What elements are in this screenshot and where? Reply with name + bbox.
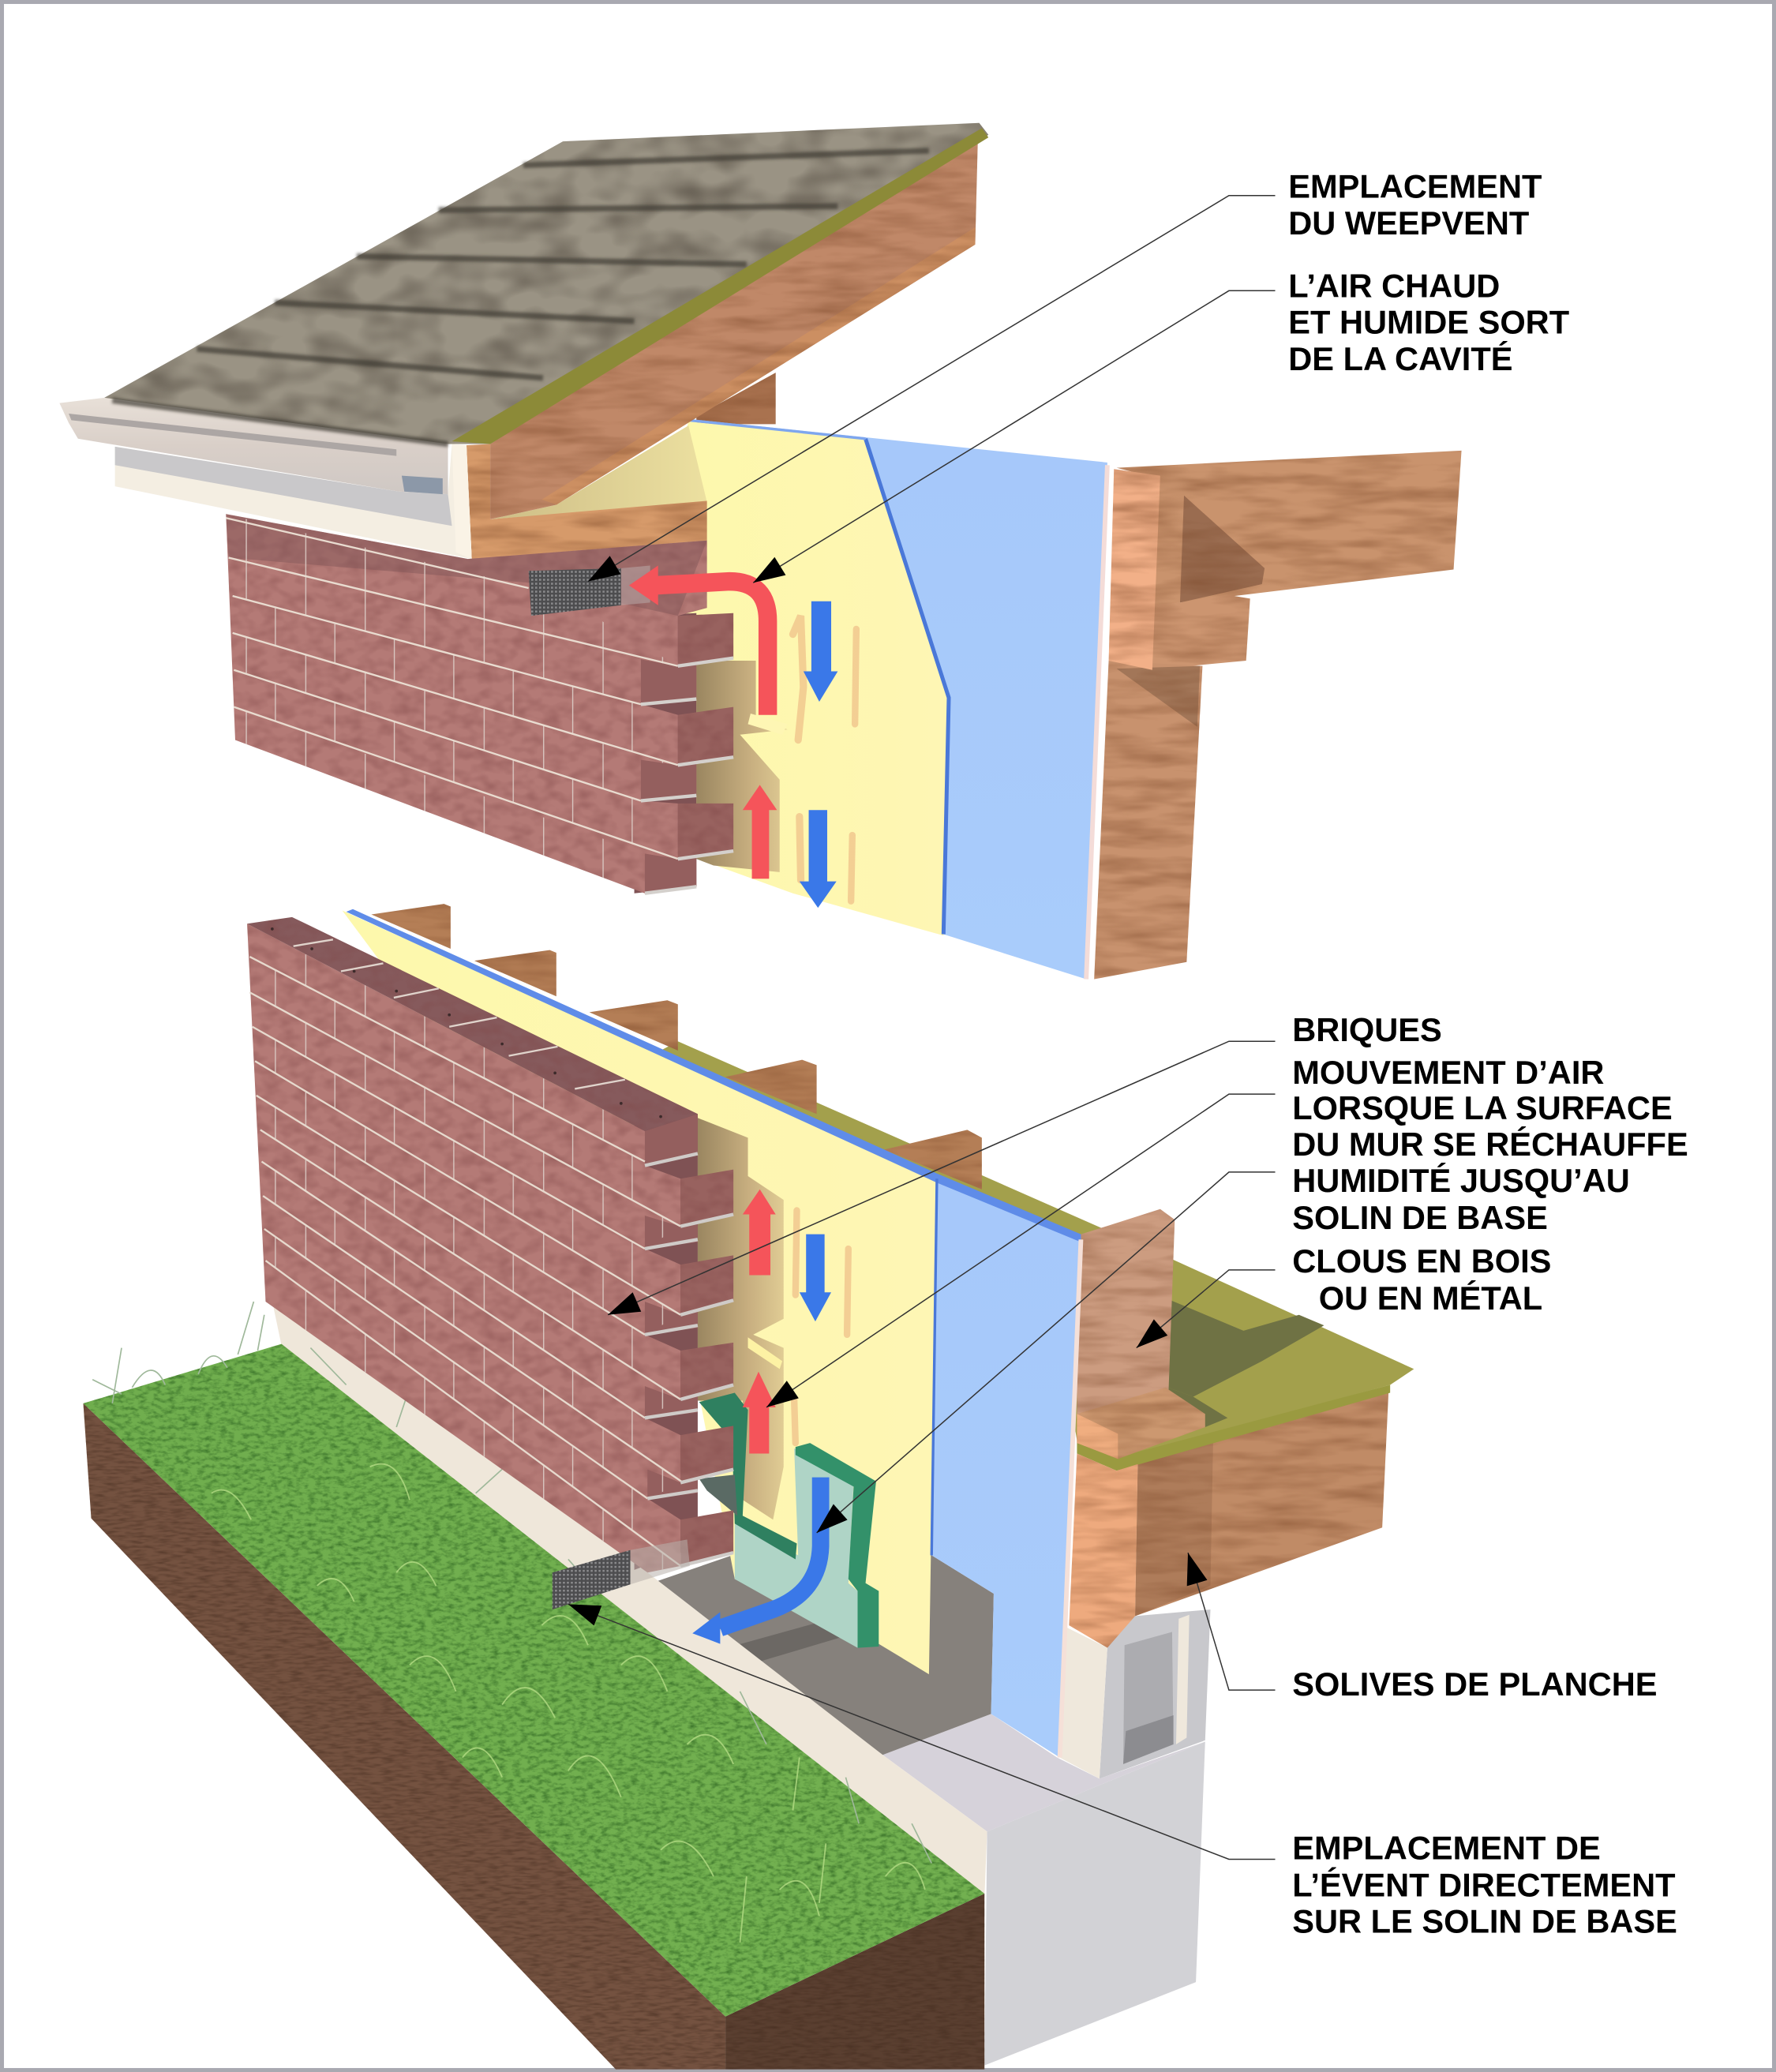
mortar lines xyxy=(249,957,684,1566)
soil block xyxy=(83,1403,984,2070)
leader: air chaud xyxy=(753,290,1276,583)
label: emplacement du weepvent: DU WEEPVENT xyxy=(1288,204,1529,242)
label: briques: BRIQUES xyxy=(1292,1011,1442,1048)
label: évent: SUR LE SOLIN DE BASE xyxy=(1292,1902,1677,1939)
label: clous: CLOUS EN BOIS xyxy=(1292,1242,1551,1280)
brick end faces xyxy=(680,1170,733,1566)
foundation concrete xyxy=(882,1714,1205,2066)
nail streaks lower xyxy=(794,1210,849,1443)
mortar lines xyxy=(226,518,678,859)
upper brick wall xyxy=(226,514,733,894)
grass blades back edge xyxy=(92,1302,931,1863)
floor sheathing xyxy=(661,1041,1414,1459)
rim joist xyxy=(1135,1386,1388,1616)
leader: humidité xyxy=(817,1172,1276,1533)
icon: weep vent upper xyxy=(529,566,650,616)
brick top face xyxy=(247,917,698,1131)
vertical stud lower xyxy=(1069,1209,1205,1648)
leader: clous xyxy=(1137,1270,1276,1348)
grass xyxy=(83,1302,984,2017)
label: humidité: SOLIN DE BASE xyxy=(1292,1199,1548,1236)
panel: blue insulation upper xyxy=(688,419,1107,980)
cavity shading lower xyxy=(698,1118,784,1519)
arrow: blue down 2 xyxy=(800,810,837,908)
label: mouvement d'air xyxy=(1292,1054,1688,1163)
cavity shading upper xyxy=(684,541,788,872)
studs behind the wall xyxy=(371,904,982,1190)
label: mouvement d'air: MOUVEMENT D’AIR xyxy=(1292,1054,1604,1091)
panel: soffit and gutter xyxy=(59,398,472,559)
wood joist upper right xyxy=(1094,451,1462,980)
label: air chaud: ET HUMIDE SORT xyxy=(1288,304,1569,341)
panel: yellow sheathing lower xyxy=(343,910,937,1674)
arrow: red up upper xyxy=(743,785,777,879)
olive edge xyxy=(1077,1384,1390,1471)
leader lines and arrowheads xyxy=(568,196,1276,1859)
label: solives: SOLIVES DE PLANCHE xyxy=(1292,1665,1658,1703)
label: air chaud: DE LA CAVITÉ xyxy=(1288,340,1512,377)
rafter xyxy=(466,139,978,559)
brick end faces xyxy=(678,613,733,859)
label: air chaud: L’AIR CHAUD xyxy=(1288,268,1500,305)
lower assembly: foundation, ground and wall xyxy=(83,904,1414,2070)
label: emplacement du weepvent xyxy=(1288,167,1542,242)
base flashing xyxy=(699,1393,879,1648)
leader: briques xyxy=(608,1041,1276,1315)
lower brick wall xyxy=(247,917,733,1572)
label: évent: L’ÉVENT DIRECTEMENT xyxy=(1292,1866,1676,1903)
concrete block xyxy=(1057,1609,1210,1778)
upper assembly: roof and wall section xyxy=(59,123,1462,980)
leader: emplacement du weepvent xyxy=(588,196,1276,582)
panel: yellow sheathing upper xyxy=(661,422,949,935)
arrow: blue down 1 xyxy=(804,601,837,702)
label: mouvement d'air: DU MUR SE RÉCHAUFFE xyxy=(1292,1126,1688,1163)
arrow: red up lower 1 xyxy=(743,1190,776,1276)
label: mouvement d'air: LORSQUE LA SURFACE xyxy=(1292,1089,1673,1126)
green underlayment edge xyxy=(452,128,988,444)
label: humidité: HUMIDITÉ JUSQU’AU xyxy=(1292,1162,1630,1199)
label: clous xyxy=(1292,1242,1551,1317)
label: évent xyxy=(1292,1829,1677,1939)
leader: solives xyxy=(1187,1553,1276,1690)
cream foundation strip xyxy=(271,1295,987,1898)
leader: évent xyxy=(568,1604,1276,1859)
nail streaks upper xyxy=(792,616,856,901)
roof shingles xyxy=(104,123,988,444)
label: air chaud xyxy=(1288,268,1569,377)
rafter behind xyxy=(696,373,776,424)
label: clous: OU EN MÉTAL xyxy=(1319,1280,1542,1317)
arrow: red up lower 2 xyxy=(743,1372,776,1454)
shadow under the roof xyxy=(490,425,707,519)
dark footing xyxy=(651,1555,994,1755)
label: humidité xyxy=(1292,1162,1630,1236)
arrow: blue down lower xyxy=(800,1235,831,1321)
icon: weep vent lower xyxy=(553,1539,690,1609)
panel: blue insulation lower xyxy=(347,909,1081,1758)
leader: mouvement d'air xyxy=(766,1094,1276,1407)
arrow: blue drain curve xyxy=(692,1478,821,1644)
label: évent: EMPLACEMENT DE xyxy=(1292,1829,1601,1866)
label: emplacement du weepvent: EMPLACEMENT xyxy=(1288,167,1542,204)
arrow: red warm air outlet xyxy=(629,566,768,715)
